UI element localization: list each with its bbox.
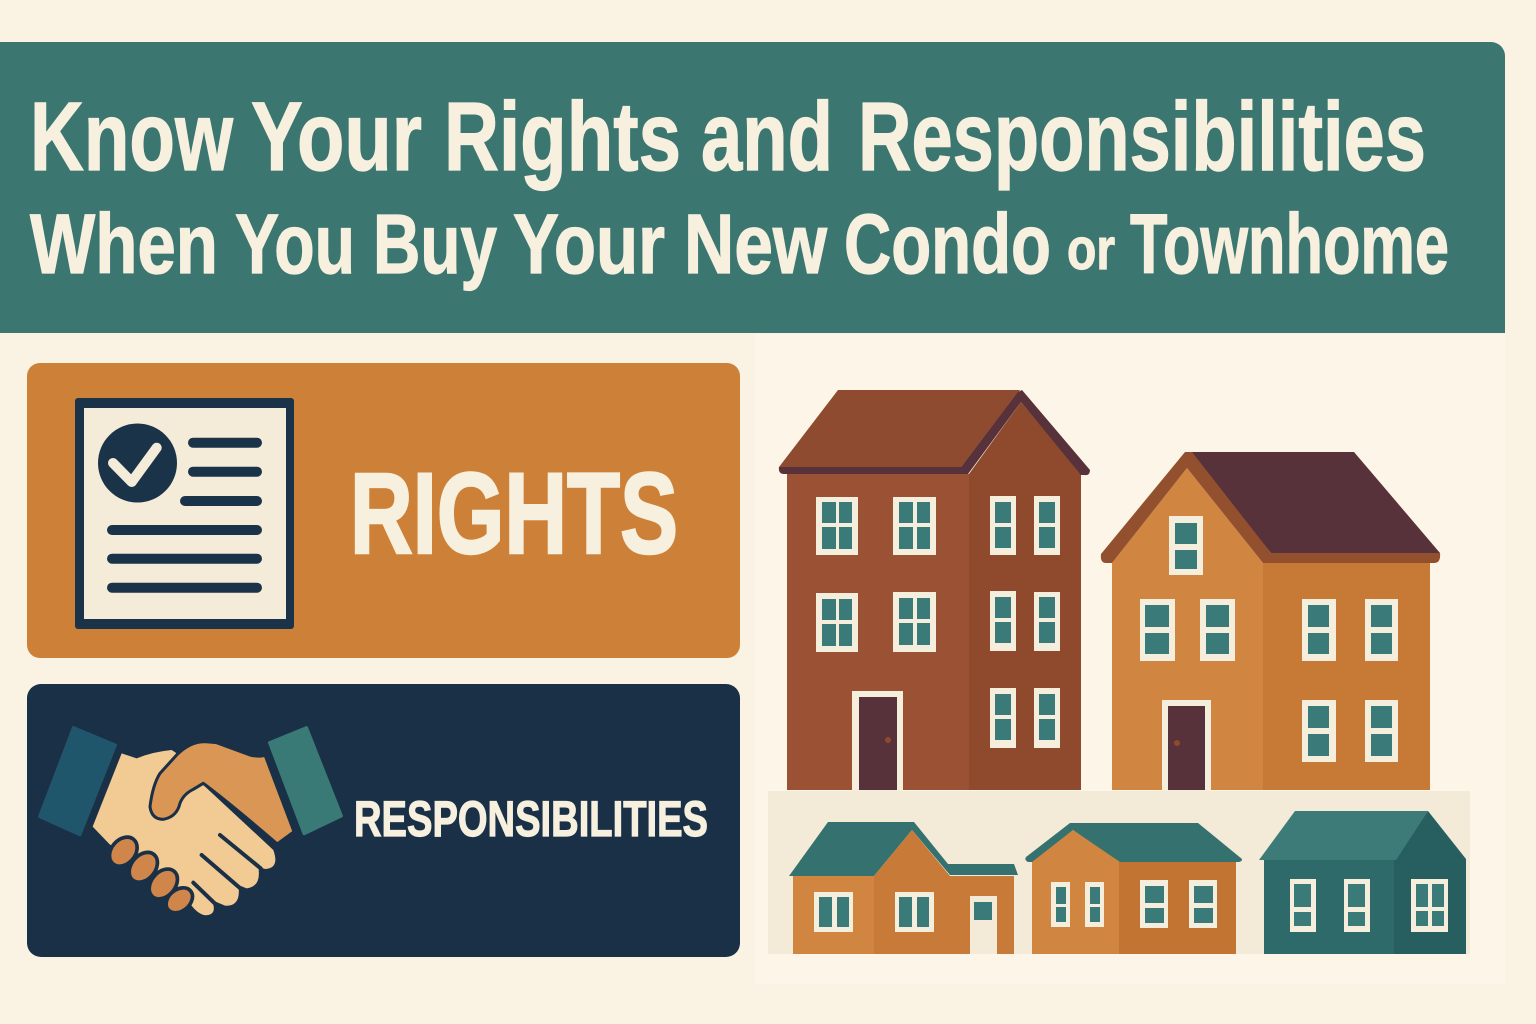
title line 2 — [30, 197, 1449, 291]
rights label: RIGHTS — [350, 450, 678, 578]
title line 1: Rights — [444, 82, 681, 191]
panel: responsibilities — [27, 684, 740, 957]
title line 1: Know — [30, 82, 233, 191]
icon: handshake — [39, 727, 342, 918]
title line 1 — [30, 82, 1426, 191]
title line 1: Your — [251, 82, 422, 191]
responsibilities label: RESPONSIBILITIES — [354, 791, 708, 847]
illustration: houses — [768, 390, 1470, 954]
title line 2: Buy — [373, 197, 497, 291]
building: orange townhouse — [1101, 452, 1440, 791]
title line 2: New — [684, 197, 828, 291]
title line 2: or — [1067, 217, 1115, 282]
icon: checklist document — [75, 398, 294, 629]
building: small orange house with garage — [789, 822, 1018, 954]
title line 1: and — [701, 82, 833, 191]
title line 2: When — [30, 197, 218, 291]
title line 2: Condo — [844, 197, 1051, 291]
building: tall brick townhouse — [779, 390, 1090, 791]
panel: rights — [27, 363, 740, 658]
building: small orange house — [1025, 823, 1242, 954]
title line 2: Your — [513, 197, 665, 291]
title banner — [0, 42, 1505, 333]
title line 2: You — [235, 197, 355, 291]
building: small teal house — [1259, 811, 1466, 954]
